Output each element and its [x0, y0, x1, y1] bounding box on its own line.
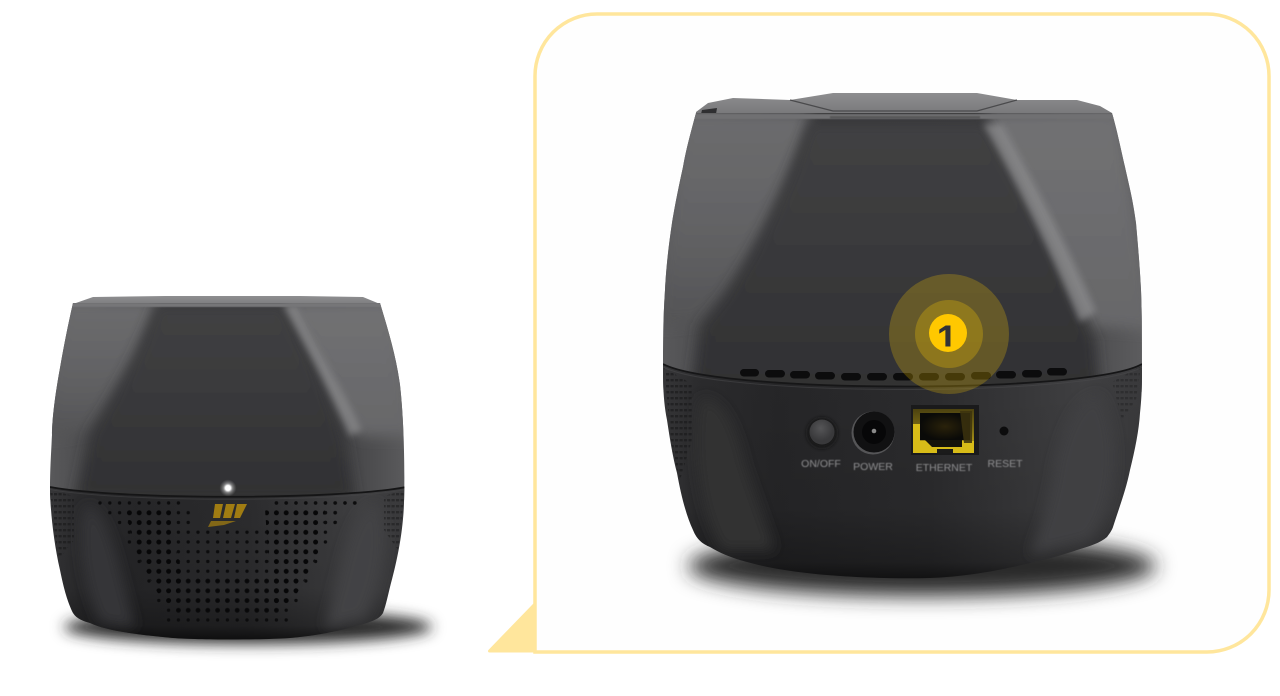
- number marker 1: [889, 274, 1009, 394]
- ethernet port: [911, 405, 979, 455]
- cap band: [60, 303, 390, 307]
- light facet highlight: [283, 305, 362, 436]
- base: [50, 487, 404, 640]
- seam: [50, 487, 406, 497]
- base lobes: [702, 406, 772, 551]
- port labels: [801, 458, 1023, 474]
- device: back view: [650, 93, 1160, 596]
- side vents: [664, 368, 692, 480]
- large grille dots: [125, 509, 185, 606]
- seam: [663, 364, 1142, 386]
- status LED: [220, 480, 236, 496]
- speaker grille: [95, 499, 359, 625]
- side vents: [50, 493, 74, 556]
- device body: [650, 112, 1160, 590]
- reset pinhole: [1000, 426, 1008, 436]
- number marker 1: 1: [937, 318, 957, 359]
- port labels: ON/OFF: [801, 458, 841, 470]
- floor shadow: [688, 536, 1156, 596]
- base lobes: [81, 505, 135, 628]
- dark central facet: [75, 304, 355, 500]
- callout panel with yellow border: [490, 14, 1269, 652]
- top cap: [696, 93, 1112, 124]
- floor shadow: [64, 610, 432, 644]
- lit right facet: [985, 112, 1155, 330]
- port labels: RESET: [987, 458, 1023, 470]
- light facet highlight: [983, 124, 1096, 322]
- lit left facet: [655, 112, 812, 326]
- lit left facet: [40, 300, 160, 436]
- logo: [208, 504, 247, 527]
- top cap: [73, 296, 380, 312]
- cap bands: [690, 114, 1120, 119]
- lit right facet: [283, 300, 415, 436]
- device body: [40, 300, 420, 645]
- base: [663, 365, 1142, 569]
- on/off button: [807, 418, 837, 448]
- power socket: [852, 412, 894, 454]
- port labels: ETHERNET: [916, 462, 973, 474]
- port labels: POWER: [853, 461, 893, 473]
- vent slots: [740, 368, 1067, 380]
- device: front view: [40, 296, 432, 645]
- dark central facet: [690, 122, 1100, 395]
